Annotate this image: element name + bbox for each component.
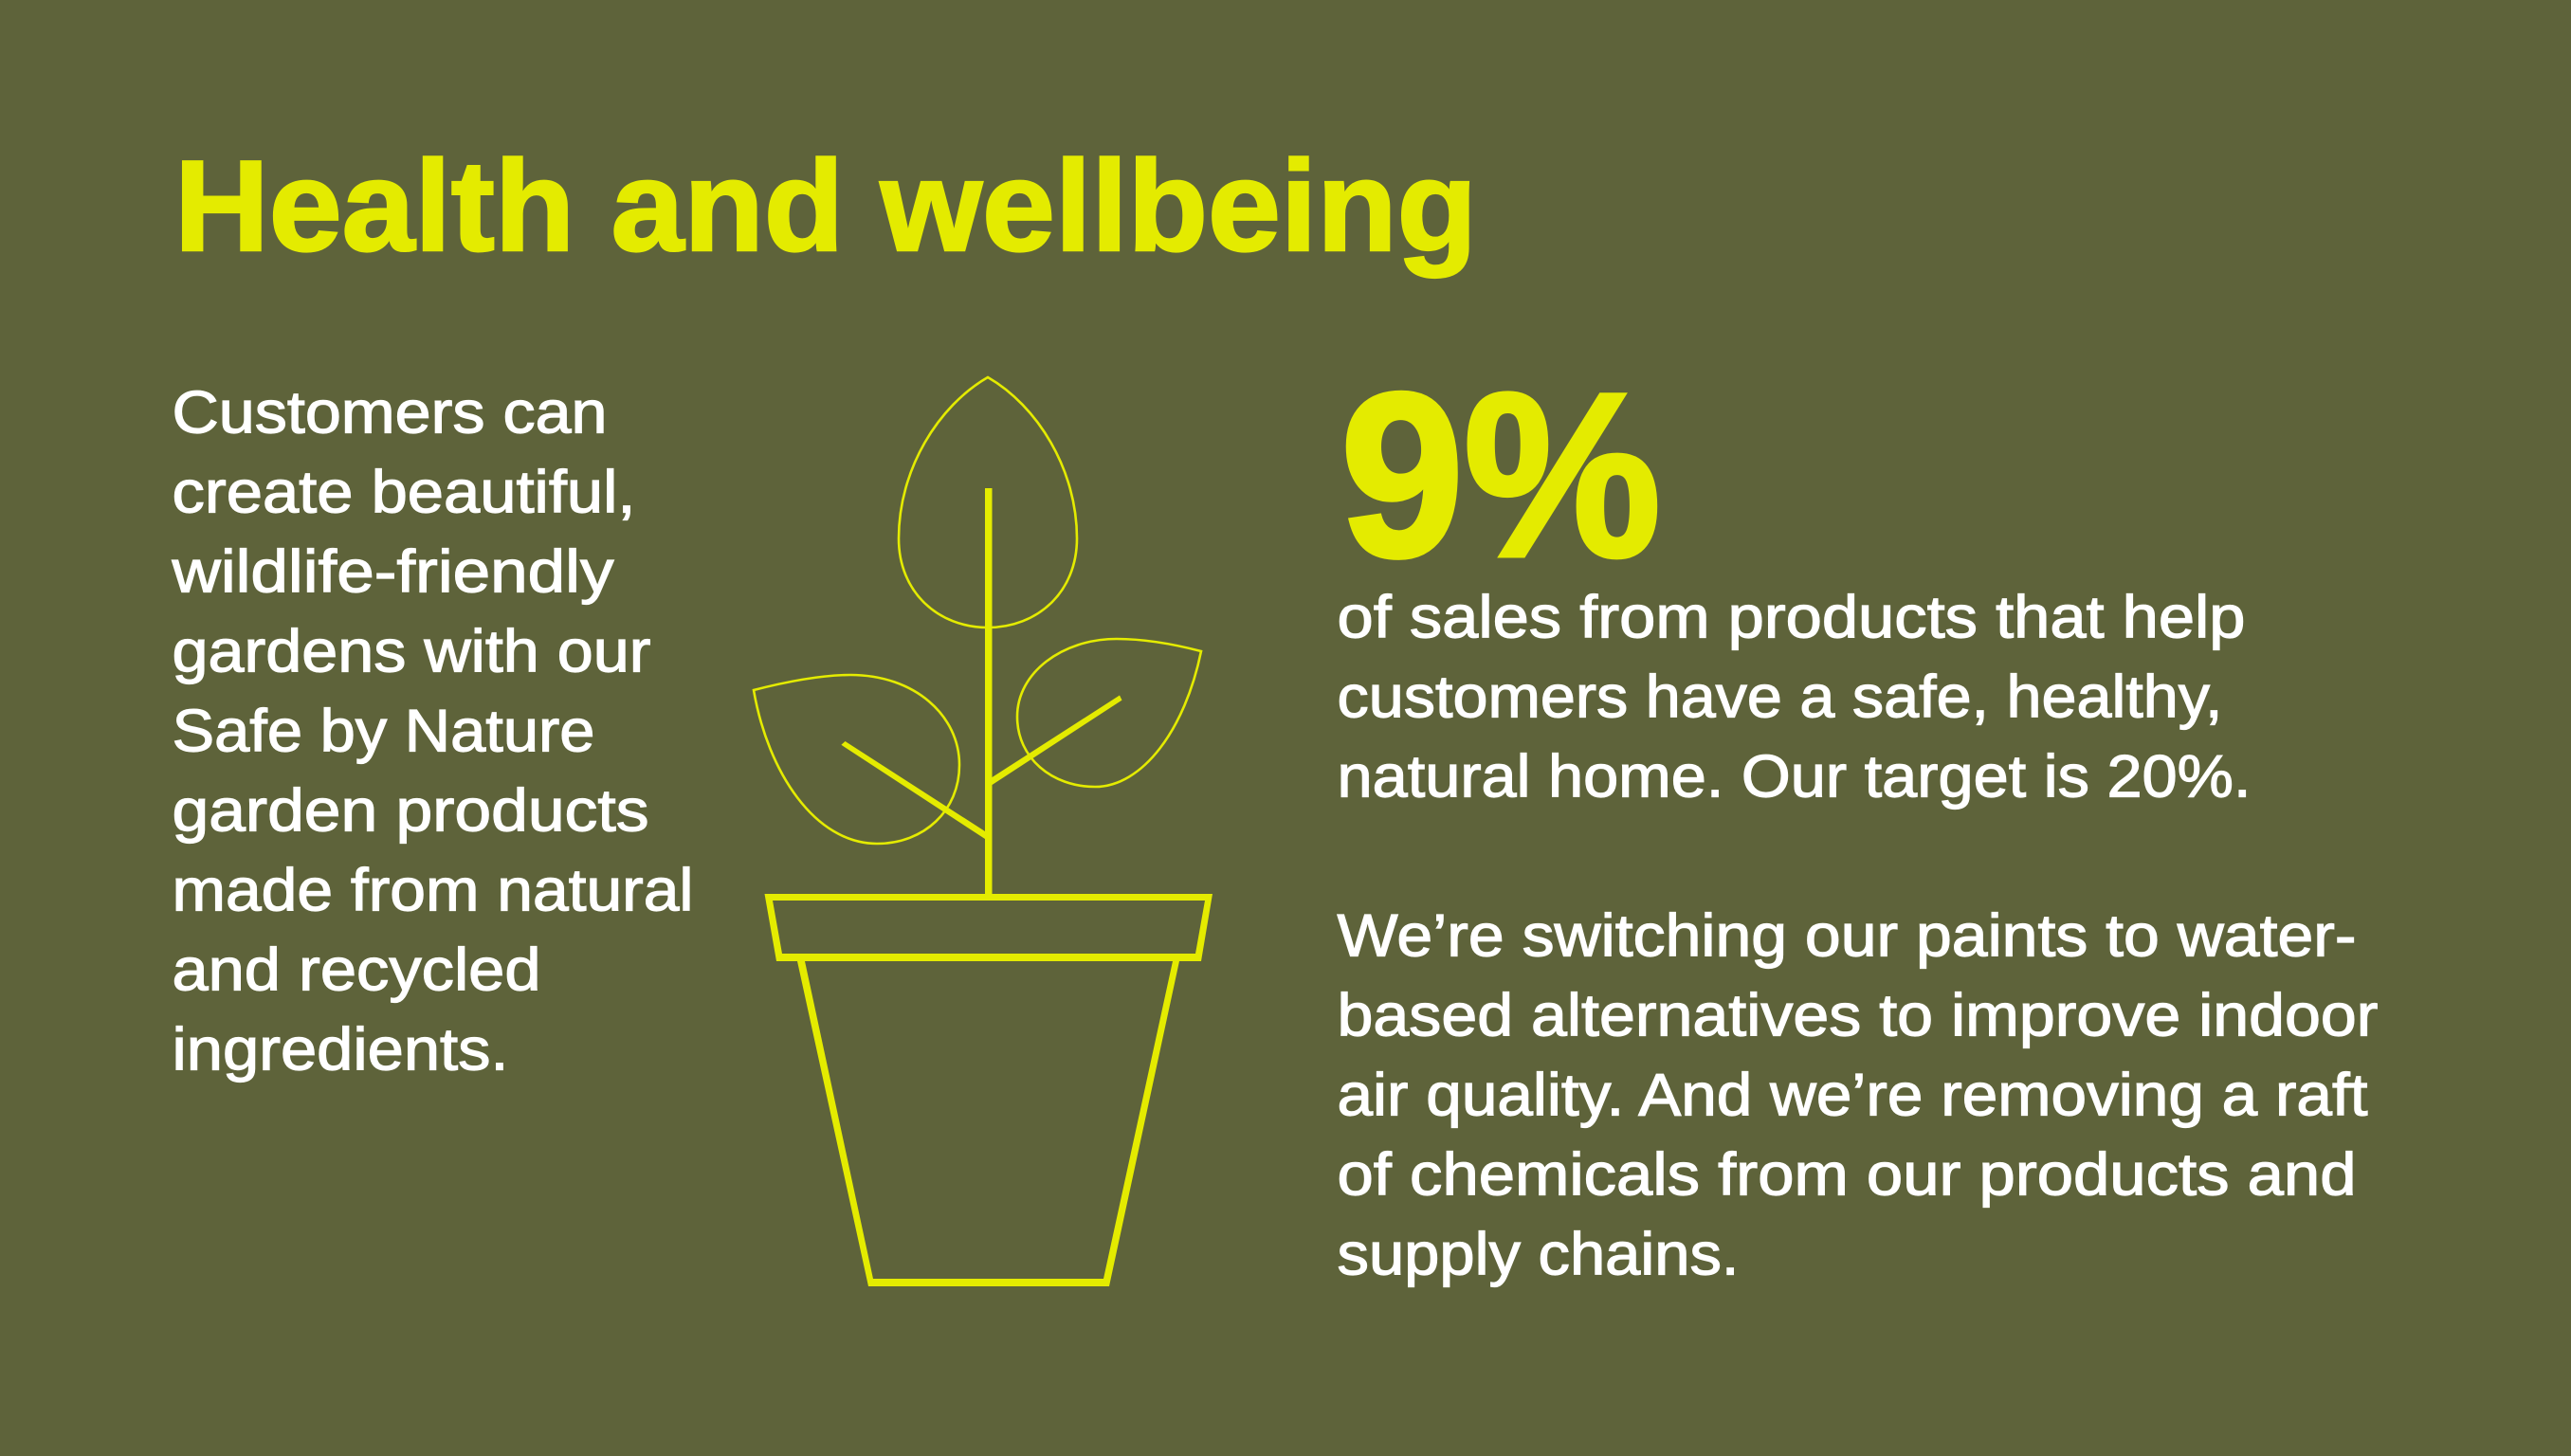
text block: garden products xyxy=(171,379,694,1083)
right leaf xyxy=(1017,639,1201,787)
left leaf xyxy=(754,675,959,844)
text block: garden products: Safe by Nature xyxy=(173,698,595,764)
text block: garden products: Customers can xyxy=(173,379,607,446)
text block: paints and chemicals: supply chains. xyxy=(1337,1221,1739,1287)
text block: sales from products: natural home. Our target is 20%. xyxy=(1337,743,2251,810)
stem xyxy=(985,488,992,896)
text block: sales from products: of sales from products that help xyxy=(1337,584,2245,650)
top leaf xyxy=(899,377,1077,628)
text block: garden products: and recycled xyxy=(173,937,540,1003)
text block: paints and chemicals: air quality. And we’re removing a raft xyxy=(1337,1062,2368,1128)
text block: paints and chemicals: of chemicals from our products and xyxy=(1337,1141,2357,1208)
icon: potted plant xyxy=(754,377,1213,1286)
pot rim xyxy=(764,894,1213,961)
text block: garden products: create beautiful, xyxy=(173,459,635,525)
left branch xyxy=(841,741,985,839)
text block: paints and chemicals: We’re switching our paints to water- xyxy=(1337,902,2357,969)
text block: sales from products: customers have a safe, healthy, xyxy=(1337,664,2222,730)
pot body xyxy=(797,961,1179,1286)
text block: paints and chemicals xyxy=(1337,902,2378,1287)
right branch xyxy=(992,696,1122,785)
statistic: 9%: 9% xyxy=(1340,345,1661,606)
text block: garden products: garden products xyxy=(173,777,648,844)
text block: garden products: wildlife-friendly xyxy=(171,538,614,605)
text block: paints and chemicals: based alternatives to improve indoor xyxy=(1337,982,2378,1048)
text block: garden products: ingredients. xyxy=(173,1016,508,1083)
text block: garden products: made from natural xyxy=(173,857,694,923)
text block: sales from products xyxy=(1337,584,2251,810)
title: Health and wellbeing xyxy=(174,134,1477,278)
text block: garden products: gardens with our xyxy=(173,618,650,684)
